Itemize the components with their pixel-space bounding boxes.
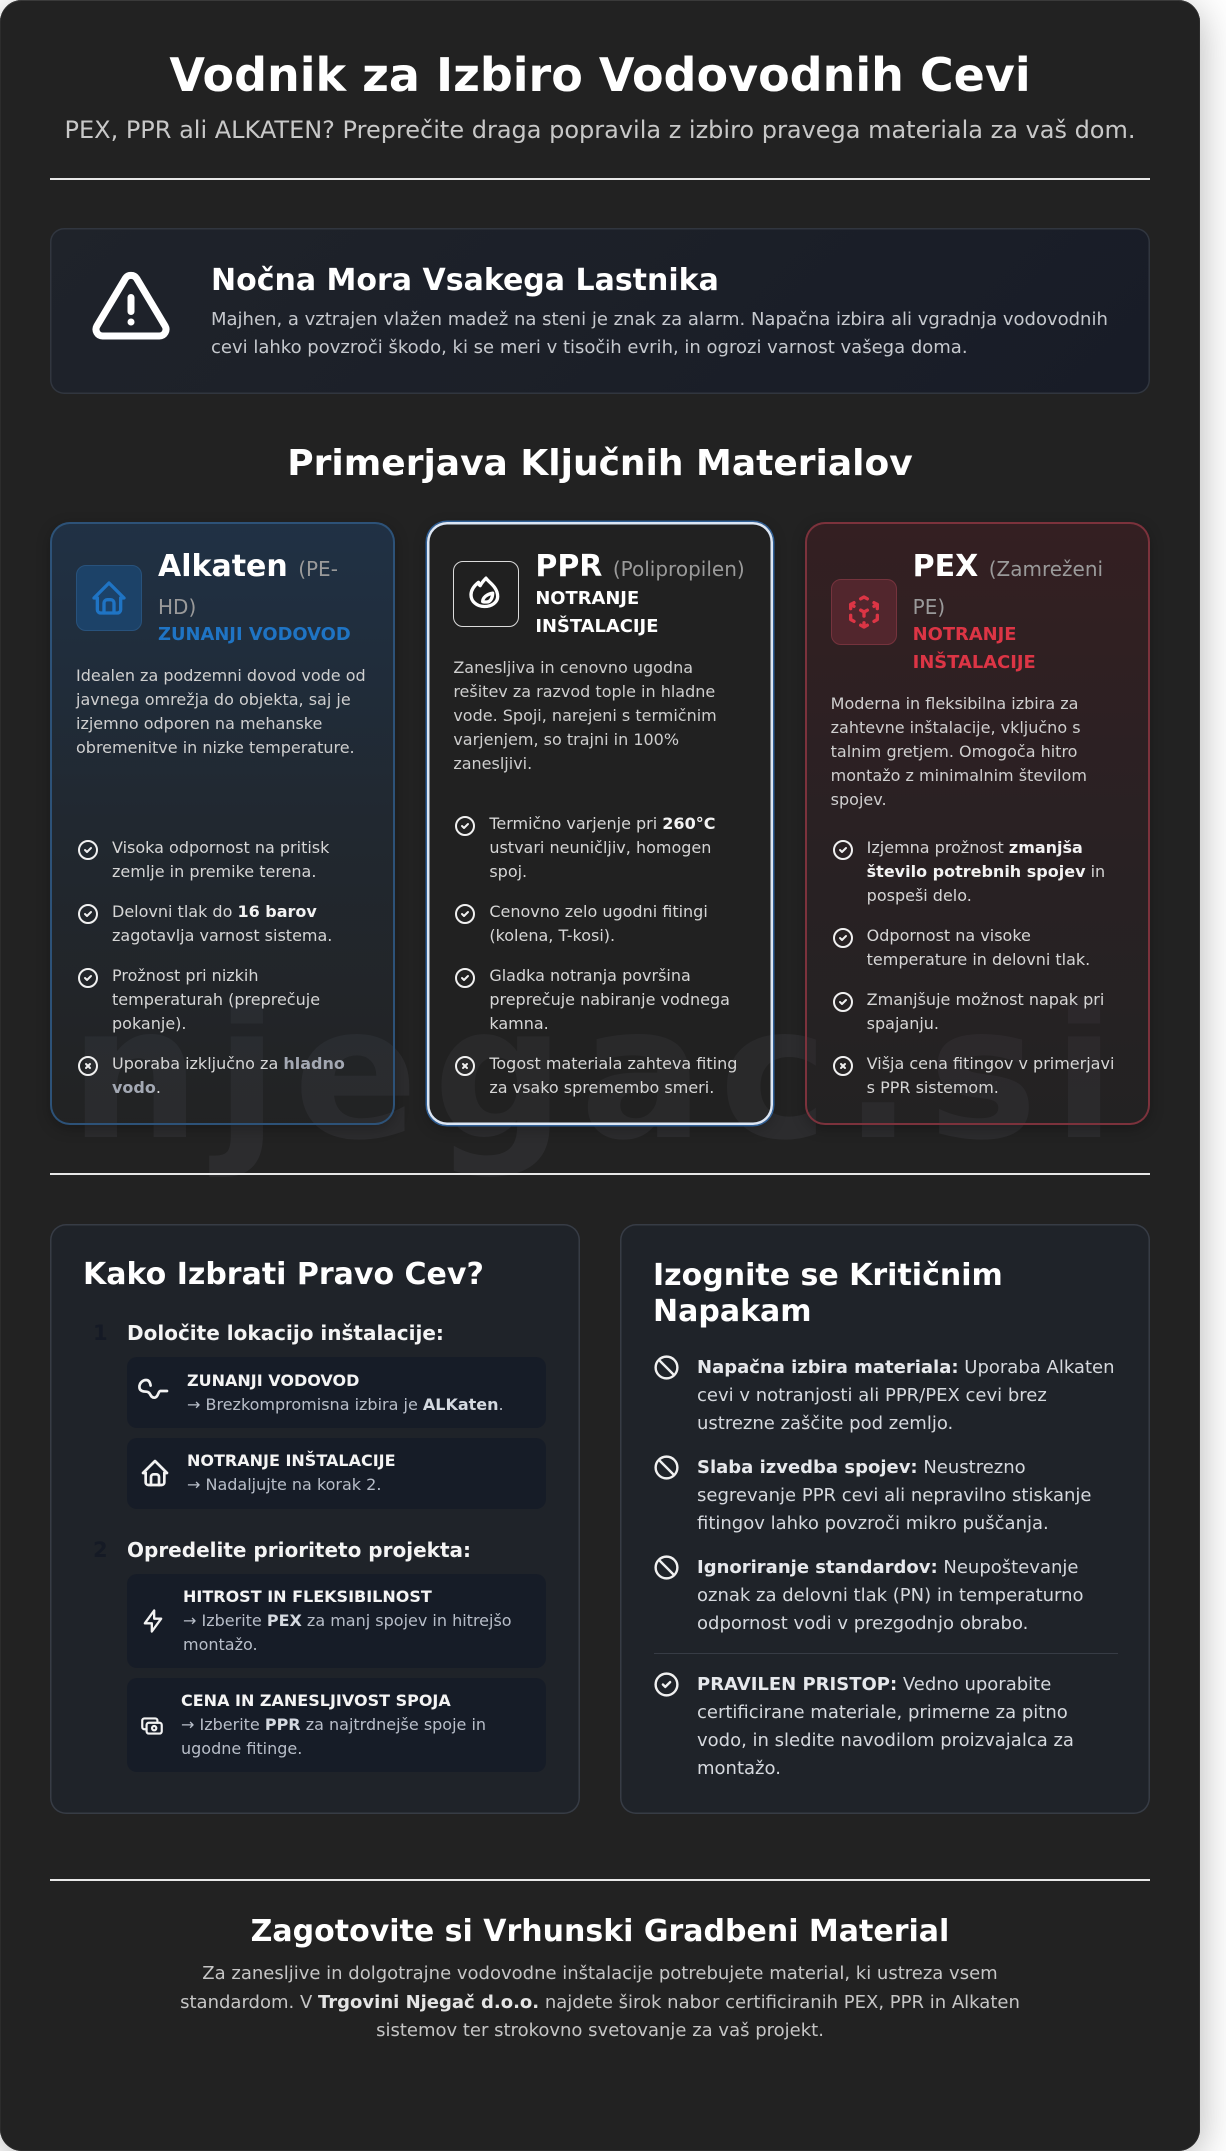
mistake item: Napačna izbira materiala: Uporaba Alkaten [697, 1356, 1114, 1378]
PPR description: Zanesljiva in cenovno ugodna [453, 658, 693, 676]
pro item: Cenovno zelo ugodni fitingi [489, 902, 708, 920]
pro item: število potrebnih spojev in [867, 862, 1105, 880]
PPR description: vode. Spoji, narejeni s termičnim [453, 706, 717, 724]
PEX description: talnim gretjem. Omogoča hitro [831, 742, 1077, 760]
PEX tag: NOTRANJE [913, 624, 1017, 645]
PEX title: PE) [913, 594, 945, 618]
con item: Višja cena fitingov v primerjavi [867, 1054, 1114, 1072]
icon: flame [453, 561, 519, 627]
PPR tag: NOTRANJE [535, 588, 639, 608]
outdoor text: ZUNANJI VODOVOD [187, 1370, 359, 1390]
Alkaten description: izjemno odporen na mehanske [76, 714, 322, 732]
con item [455, 1054, 737, 1096]
correct approach: montažo. [697, 1758, 781, 1779]
pro item: Visoka odpornost na pritisk [112, 838, 329, 856]
pro item [78, 966, 320, 1032]
con item: Uporaba izključno za hladno [112, 1054, 345, 1072]
footer text: sistemov ter strokovno svetovanje za vaš projekt. [376, 2020, 824, 2041]
watermark: njegac.si [69, 967, 1131, 1181]
PEX description: spojev. [831, 790, 887, 808]
PPR description [453, 658, 717, 772]
pro item: Termično varjenje pri 260°C [489, 814, 715, 832]
panel: PPR card [427, 522, 773, 1125]
pro item [455, 966, 730, 1032]
price text [181, 1690, 486, 1758]
mistake item [654, 1355, 1114, 1434]
mistakes heading [653, 1258, 1003, 1329]
step 2 heading: Opredelite prioriteto projekta: [127, 1538, 471, 1562]
pro item: temperaturah (preprečuje [112, 990, 320, 1008]
speed text: HITROST IN FLEKSIBILNOST [183, 1586, 432, 1606]
pro item: ustvari neuničljiv, homogen [489, 838, 711, 856]
title: Vodnik za Izbiro Vodovodnih Cevi [169, 48, 1031, 102]
pro item: Prožnost pri nizkih [112, 966, 259, 984]
option: speed [127, 1574, 546, 1668]
pro item: zagotavlja varnost sistema. [112, 926, 332, 944]
mistake item: Ignoriranje standardov: Neupoštevanje [697, 1556, 1078, 1578]
option: outdoor [127, 1357, 546, 1428]
speed text: montažo. [183, 1635, 258, 1654]
pro item: (kolena, T-kosi). [489, 926, 615, 944]
footer text: Za zanesljive in dolgotrajne vodovodne inštalacije potrebujete material, ki ustreza vsem [202, 1963, 998, 1984]
pro item [78, 902, 332, 944]
Alkaten description [76, 666, 366, 756]
alert heading: Nočna Mora Vsakega Lastnika [211, 263, 719, 298]
PEX description: zahtevne inštalacije, vključno s [831, 718, 1081, 736]
step number 2: 2 [93, 1538, 108, 1562]
speed text: → Izberite PEX za manj spojev in hitrejšo [183, 1611, 512, 1630]
mistake item: odpornost vodi v prezgodnjo obrabo. [697, 1613, 1028, 1634]
mistake item: Slaba izvedba spojev: Neustrezno [697, 1456, 1026, 1478]
icon: cube sphere [831, 579, 897, 645]
speed text [183, 1586, 512, 1654]
comparison heading: Primerjava Ključnih Materialov [287, 443, 913, 484]
footer text [180, 1963, 1020, 2041]
Alkaten title: Alkaten (PE- [158, 548, 338, 584]
pro item [833, 990, 1104, 1032]
correct approach: vodo, in sledite navodilom proizvajalca za [697, 1730, 1074, 1751]
footer heading: Zagotovite si Vrhunski Gradbeni Material [251, 1914, 949, 1949]
mistake item: segrevanje PPR cevi ali nepravilno stiskanje [697, 1485, 1091, 1506]
pro item: Zmanjšuje možnost napak pri [867, 990, 1104, 1008]
step 1 heading: Določite lokacijo inštalacije: [127, 1321, 444, 1345]
outdoor text: → Brezkompromisna izbira je ALKaten. [187, 1395, 504, 1414]
pro item: temperature in delovni tlak. [867, 950, 1090, 968]
indoor text: NOTRANJE INŠTALACIJE [187, 1451, 396, 1470]
alert text: cevi lahko povzroči škodo, ki se meri v tisočih evrih, in ogrozi varnost vašega doma. [211, 336, 968, 358]
Alkaten title: HD) [158, 594, 196, 618]
PPR tag: INŠTALACIJE [535, 616, 658, 636]
mistakes heading: Napakam [653, 1294, 812, 1329]
correct approach: certificirane materiale, primerne za pitno [697, 1702, 1068, 1723]
pro item [78, 838, 330, 880]
icon: cash [141, 1717, 163, 1735]
mistake item: oznak za delovni tlak (PN) in temperaturno [697, 1585, 1084, 1606]
mistake item: ustrezne zaščite pod zemljo. [697, 1413, 953, 1434]
PEX title: PEX (Zamreženi [913, 548, 1103, 584]
alert text [211, 308, 1108, 358]
icon: house [76, 565, 142, 631]
step number 1: 1 [93, 1321, 108, 1345]
PPR description: zanesljivi. [453, 754, 532, 772]
Alkaten title [158, 548, 338, 618]
con item: s PPR sistemom. [867, 1078, 999, 1096]
how to choose heading: Kako Izbrati Pravo Cev? [83, 1257, 484, 1292]
pro item: pokanje). [112, 1014, 186, 1032]
PEX description: Moderna in fleksibilna izbira za [831, 694, 1078, 712]
mistakes heading: Izognite se Kritičnim [653, 1258, 1003, 1293]
indoor text [187, 1450, 396, 1494]
panel: PEX card [805, 522, 1150, 1125]
mistake item [654, 1555, 1084, 1634]
icon: home [142, 1460, 168, 1486]
pro item [833, 926, 1090, 968]
pro item: pospeši delo. [867, 886, 972, 904]
pro item: kamna. [489, 1014, 549, 1032]
pro item: preprečuje nabiranje vodnega [489, 990, 730, 1008]
Alkaten description: obremenitve in nizke temperature. [76, 738, 355, 756]
option: indoor [127, 1438, 546, 1509]
PPR title: PPR (Polipropilen) [535, 548, 745, 584]
Alkaten description: Idealen za podzemni dovod vode od [76, 666, 366, 684]
icon: pipe [138, 1378, 168, 1399]
indoor text: → Nadaljujte na korak 2. [187, 1475, 381, 1494]
con item [833, 1054, 1114, 1096]
pro item: spoj. [489, 862, 527, 880]
pro item [455, 902, 708, 944]
PPR description: varjenjem, so trajni in 100% [453, 730, 679, 748]
alert text: Majhen, a vztrajen vlažen madež na steni je znak za alarm. Napačna izbira ali vgradnja vodovodnih [211, 308, 1108, 330]
PEX description [831, 694, 1087, 808]
PEX tag: INŠTALACIJE [913, 652, 1036, 673]
pro item: Gladka notranja površina [489, 966, 691, 984]
PEX description: montažo z minimalnim številom [831, 766, 1087, 784]
price text: ugodne fitinge. [181, 1739, 302, 1758]
price text: → Izberite PPR za najtrdnejše spoje in [181, 1715, 486, 1734]
panel: Alkaten card [50, 522, 395, 1125]
correct approach: PRAVILEN PRISTOP: Vedno uporabite [697, 1674, 1051, 1694]
Alkaten description: javnega omrežja do objekta, saj je [76, 690, 351, 708]
panel: critical mistakes [620, 1224, 1150, 1814]
mistake item: cevi v notranjosti ali PPR/PEX cevi brez [697, 1385, 1047, 1406]
PEX title [913, 548, 1103, 618]
pro item [833, 838, 1105, 904]
correct approach [654, 1672, 1074, 1779]
pro item [455, 814, 715, 880]
icon: warning triangle [92, 272, 170, 340]
pro item: Odpornost na visoke [867, 926, 1031, 944]
subtitle: PEX, PPR ali ALKATEN? Preprečite draga popravila z izbiro pravega materiala za vaš dom. [64, 116, 1136, 144]
panel: alert [50, 228, 1150, 394]
pro item: spajanju. [867, 1014, 939, 1032]
Alkaten tag: ZUNANJI VODOVOD [158, 624, 351, 645]
PPR tag [535, 588, 658, 636]
con item [78, 1054, 345, 1096]
icon: bolt [144, 1609, 162, 1633]
con item: za vsako spremembo smeri. [489, 1078, 714, 1096]
option: price [127, 1678, 546, 1772]
con item: vodo. [112, 1078, 161, 1096]
panel: how to choose [50, 1224, 580, 1814]
pro item: Izjemna prožnost zmanjša [867, 838, 1083, 856]
PEX tag [913, 624, 1036, 673]
pro item: zemlje in premike terena. [112, 862, 316, 880]
mistake item: fitingov lahko povzroči mikro puščanja. [697, 1513, 1049, 1534]
con item: Togost materiala zahteva fiting [489, 1054, 737, 1072]
outdoor text [187, 1370, 504, 1414]
price text: CENA IN ZANESLJIVOST SPOJA [181, 1690, 451, 1710]
mistake item [654, 1455, 1091, 1534]
pro item: Delovni tlak do 16 barov [112, 902, 317, 920]
footer text: standardom. V Trgovini Njegač d.o.o. najdete širok nabor certificiranih PEX, PPR in Alkaten [180, 1992, 1020, 2012]
PPR description: rešitev za razvod tople in hladne [453, 682, 715, 700]
